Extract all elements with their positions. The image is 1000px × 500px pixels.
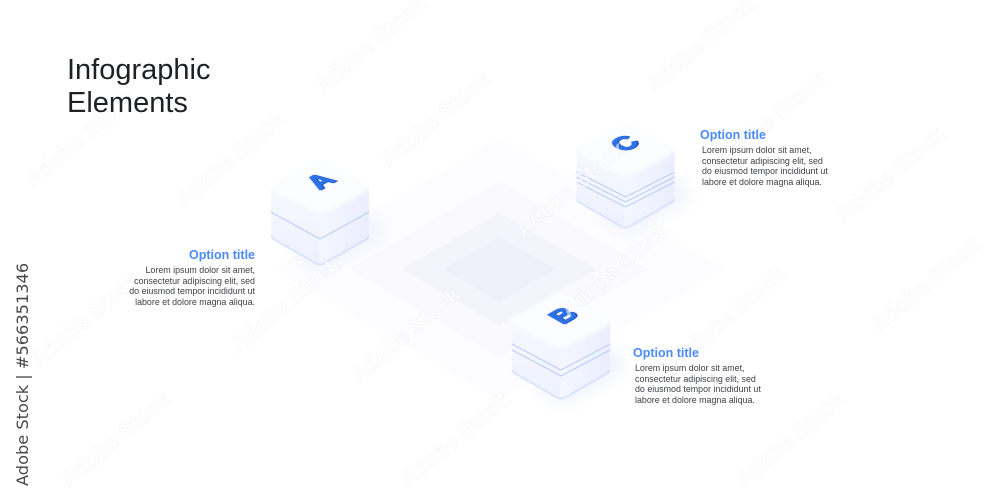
text block B — [633, 346, 761, 405]
text block C: Lorem ipsum dolor sit amet, — [702, 145, 812, 155]
watermark pattern: Adobe Stock — [671, 261, 790, 367]
isometric floor layers — [271, 137, 727, 401]
text block A — [129, 248, 256, 307]
watermark pattern: Adobe Stock — [396, 386, 515, 492]
watermark pattern: Adobe Stock — [731, 386, 850, 492]
text block A: Option title — [189, 248, 255, 262]
watermark pattern: Adobe Stock — [866, 231, 985, 337]
letter A: A — [299, 168, 343, 193]
text block C: consectetur adipiscing elit, sed — [702, 156, 823, 166]
watermark pattern: Adobe Stock — [21, 86, 140, 192]
letter A: A — [298, 168, 341, 193]
text block B: labore et dolore magna aliqua. — [635, 395, 755, 405]
letter B: B — [541, 303, 584, 328]
title: Elements — [67, 87, 188, 119]
watermark pattern: Adobe Stock — [171, 106, 290, 212]
letter B: B — [542, 303, 586, 328]
watermark pattern: Adobe Stock — [556, 216, 675, 322]
watermark pattern: Adobe Stock — [511, 136, 630, 242]
stock credit: Adobe Stock | #566351346 — [13, 263, 32, 486]
text block B: consectetur adipiscing elit, sed — [635, 374, 756, 384]
cube B — [512, 293, 627, 405]
watermark pattern: Adobe Stock — [56, 386, 175, 492]
watermark pattern: Adobe Stock — [831, 121, 950, 227]
letter B: B — [541, 303, 584, 328]
letter C: C — [602, 131, 646, 156]
text block A: Lorem ipsum dolor sit amet, — [146, 265, 255, 275]
text block C: do eiusmod tempor incididunt ut — [702, 166, 828, 176]
text block C: Option title — [700, 128, 766, 142]
watermark pattern: Adobe Stock — [26, 266, 145, 372]
text block A: labore et dolore magna aliqua. — [135, 297, 255, 307]
text block B: do eiusmod tempor incididunt ut — [635, 384, 761, 394]
text block B: Option title — [633, 346, 699, 360]
cube C — [576, 122, 692, 234]
watermark pattern: Adobe Stock — [226, 251, 345, 357]
text block B: Lorem ipsum dolor sit amet, — [635, 363, 744, 373]
title: Infographic — [67, 54, 210, 86]
letter C: C — [602, 131, 646, 156]
letter A: A — [298, 168, 341, 193]
cube A — [271, 159, 386, 271]
watermark pattern: Adobe Stock — [711, 66, 830, 172]
watermark pattern: Adobe Stock — [376, 66, 495, 172]
text block A: do eiusmod tempor incididunt ut — [129, 286, 256, 296]
text block C — [700, 128, 828, 187]
text block A: consectetur adipiscing elit, sed — [134, 276, 255, 286]
letter C: C — [604, 131, 648, 156]
text block C: labore et dolore magna aliqua. — [702, 177, 822, 187]
watermark pattern: Adobe Stock — [346, 281, 465, 387]
